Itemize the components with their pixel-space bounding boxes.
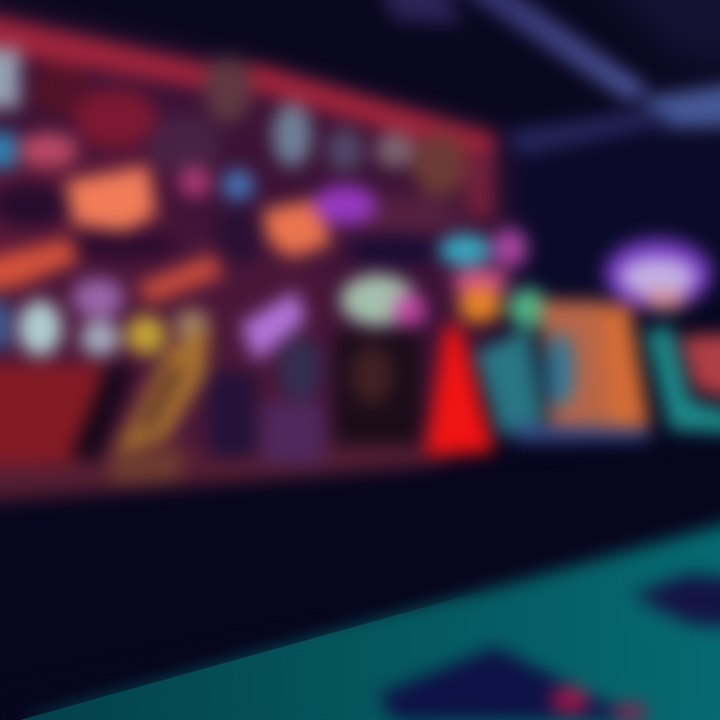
gold cabinet: [114, 325, 210, 452]
floor red marks: [550, 686, 648, 720]
colourful cabinets right: [475, 300, 720, 442]
wall upper detail: [0, 48, 495, 266]
middle row machines: [0, 274, 426, 400]
orange glow panels: [0, 165, 377, 304]
floor base under blur: [20, 525, 720, 720]
red cabinet left: [0, 364, 104, 466]
neon sign cluster: [439, 228, 548, 328]
ceiling light streaks: [375, 0, 720, 156]
red neon cone: [425, 325, 495, 456]
dark gap: [70, 365, 135, 460]
purple neon sign: [604, 238, 712, 310]
purple cabinets: [208, 332, 420, 464]
floor dark tiles: [378, 574, 720, 720]
lower wall reflection: [110, 448, 185, 484]
red top band: [0, 8, 495, 162]
soft base tones: [0, 0, 720, 510]
teal floor: [20, 505, 720, 720]
dark stage band: [0, 438, 720, 700]
